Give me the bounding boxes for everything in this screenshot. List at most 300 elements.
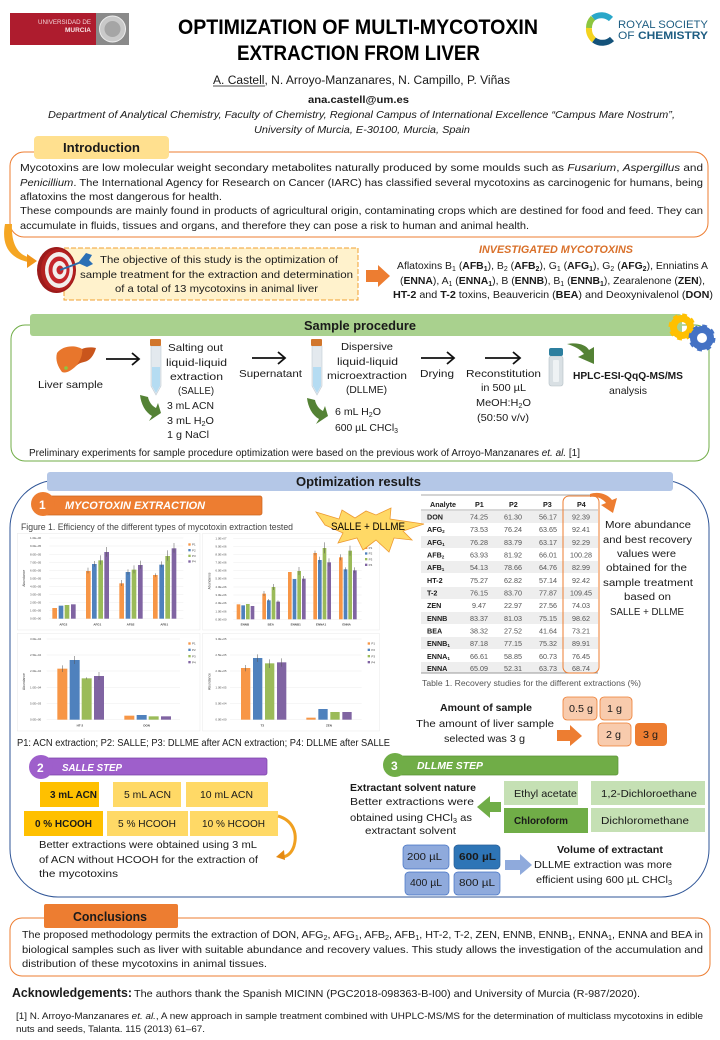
- table: recovery studies: 9.47: [472, 601, 486, 610]
- chart: aflatoxins: 3.0E+05: [30, 593, 42, 597]
- authors: A. Castell, N. Arroyo-Manzanares, N. Campillo, P. Viñas: [213, 75, 510, 87]
- chart: enniatins: 1.0E+07: [215, 536, 227, 540]
- label: supernatant: Supernatant: [239, 368, 302, 380]
- table: recovery studies: Analyte: [430, 500, 456, 509]
- heading: step 2 SALLE: SALLE STEP: [62, 763, 122, 774]
- chart: HT-2 and DON: 3.0E+04: [30, 637, 42, 641]
- heading: step 1 mycotoxin extraction: MYCOTOXIN EXTRACTION: [65, 500, 206, 512]
- caption: table 1: Table 1. Recovery studies for the different extractions (%): [422, 679, 641, 688]
- chart: aflatoxins: 7.0E+05: [30, 560, 42, 564]
- text: volume of extractant: DLLME extraction was more: [534, 859, 672, 871]
- text: conclusions body: , ENNA: [572, 930, 608, 941]
- chart: T2 and ZEN: P1: [371, 642, 375, 646]
- table: recovery studies: 75.27: [470, 576, 488, 585]
- heading: introduction: Introduction: [63, 141, 140, 155]
- text: analysis: HPLC-ESI-QqQ-MS/MS: [573, 370, 683, 382]
- text: SALLE result: the mycotoxins: [39, 868, 118, 880]
- table: recovery studies: P4: [577, 500, 586, 509]
- text: abundance conclusion: based on: [624, 591, 671, 603]
- panel: investigated mycotoxins: ), Enniatins A: [647, 261, 708, 272]
- table: recovery studies: 81.92: [504, 550, 522, 560]
- chart: T2 and ZEN: 2.0E+05: [215, 669, 227, 673]
- table: recovery studies: 76.15: [470, 588, 488, 598]
- text: abundance conclusion: [603, 519, 693, 618]
- table: recovery studies: ENNA: [427, 664, 447, 673]
- table: recovery studies: 92.41: [572, 525, 590, 534]
- icon: target with dart: [37, 247, 93, 293]
- chart: aflatoxins: Abundance: [22, 570, 26, 587]
- text: SALLE result: of ACN without HCOOH for the extraction of: [39, 854, 258, 866]
- table: recovery studies: 63.93: [470, 550, 488, 560]
- panel: conclusions: [10, 904, 710, 976]
- text: abundance conclusion: SALLE + DLLME: [610, 606, 684, 618]
- chart: aflatoxins: 4.0E+05: [30, 584, 42, 588]
- text: conclusions body: 1: [568, 935, 572, 942]
- chart: enniatins: ENNA1: [316, 623, 326, 627]
- text: SALLE result: [39, 839, 258, 880]
- chart: HT-2 and DON: 0.0E+00: [30, 718, 42, 722]
- text: SALLE: (SALLE): [178, 385, 214, 397]
- panel: investigated mycotoxins: 1: [557, 266, 561, 273]
- options: solvents: Ethyl acetate: [514, 789, 577, 800]
- panel: investigated mycotoxins: 2: [536, 266, 540, 273]
- panel: objective: [64, 248, 358, 300]
- chart: HT-2 and DON: P2: [192, 648, 196, 652]
- chart: T2 and ZEN: 1.0E+05: [215, 685, 227, 689]
- table: recovery studies: 66.01: [539, 550, 557, 560]
- text: DLLME: [327, 341, 407, 396]
- text: reconstitution: in 500 µL: [481, 382, 526, 394]
- chart: T2 and ZEN: P3: [371, 654, 375, 658]
- options: ACN and HCOOH: 10 mL ACN: [200, 790, 253, 801]
- table: recovery studies: 63.73: [539, 664, 557, 673]
- options: sample amount: [563, 697, 667, 746]
- panel: investigated mycotoxins: (: [456, 261, 463, 272]
- text: abundance conclusion: and best recovery: [603, 534, 693, 546]
- chart: aflatoxins: P4: [192, 560, 196, 564]
- table: recovery studies: 27.56: [539, 601, 557, 610]
- text: SALLE: liquid-liquid: [166, 357, 227, 369]
- chart: aflatoxins: AFB1: [160, 623, 168, 627]
- table: recovery studies: P2: [509, 500, 518, 509]
- chart: T2 and ZEN: ZEN: [326, 724, 332, 728]
- text: analysis: [573, 370, 683, 397]
- text: extractant solvent: [350, 783, 476, 837]
- text: preliminary note: Preliminary experiments for sample procedure optimization were based on the previous work of Arroyo-Manzanares et. al. [1]: [29, 448, 580, 459]
- chart: enniatins: 2.0E+06: [215, 601, 227, 605]
- text: conclusions body: [22, 930, 703, 970]
- panel: objective: sample treatment for the extraction and determination: [80, 269, 353, 281]
- panel: sample procedure: [11, 314, 709, 461]
- table: recovery studies: BEA: [427, 626, 442, 636]
- text: DLLME reagents: [335, 406, 398, 435]
- panel: investigated mycotoxins: ENNB), B: [515, 276, 560, 287]
- heading: optimization results: [47, 472, 673, 491]
- text: acknowledgements: The authors thank the Spanish MICINN (PGC2018-098363-B-I00) and University of Murcia (R-987/2020).: [134, 989, 640, 1000]
- text: introduction body: Mycotoxins are low molecular weight secondary metabolites naturally produced by some moulds such as Fusarium , Aspergillus and: [20, 163, 703, 174]
- chart: enniatins: 7.0E+06: [215, 561, 227, 565]
- label: drying: Drying: [420, 368, 454, 380]
- options: extractant volume: 600 µL: [459, 852, 497, 863]
- table: recovery studies: 54.13: [470, 563, 488, 572]
- chart: enniatins: P3: [369, 557, 373, 561]
- heading: step 3 DLLME: [383, 753, 618, 777]
- table: recovery studies: ZEN: [427, 601, 441, 610]
- text: reconstitution: [466, 368, 541, 424]
- text: DLLME reagents: 3: [394, 428, 398, 435]
- options: extractant volume: 200 µL: [407, 852, 442, 863]
- options: ACN and HCOOH: 10 % HCOOH: [202, 819, 265, 830]
- text: conclusions body: The proposed methodology permits the extraction of DON, AFG: [22, 930, 315, 941]
- chart: enniatins: 5.0E+06: [215, 577, 227, 581]
- panel: investigated mycotoxins: (: [614, 261, 621, 272]
- icon: gears: [670, 315, 714, 350]
- panel: investigated mycotoxins: ENNA: [459, 276, 492, 288]
- chart: aflatoxins: 9.0E+05: [30, 544, 42, 548]
- arrow: solvent: [477, 796, 501, 818]
- text: extractant solvent: extractant solvent: [365, 825, 456, 837]
- logo: Royal Society of Chemistry: OF CHEMISTRY: [618, 30, 709, 42]
- text: amount of sample: Amount of sample: [440, 703, 532, 714]
- panel: investigated mycotoxins: 1: [589, 266, 593, 273]
- chart: HT-2 and DON: P3: [192, 654, 196, 658]
- text: reconstitution: O: [523, 397, 531, 409]
- text: extractant solvent: Extractant solvent nature: [350, 783, 476, 794]
- panel: investigated mycotoxins: ), B (: [492, 276, 515, 287]
- chart: enniatins: BEA: [268, 623, 275, 627]
- panel: investigated mycotoxins: ZEN),: [678, 276, 705, 287]
- table: recovery studies: 64.76: [539, 563, 557, 572]
- options: solvents: [504, 781, 705, 833]
- chart: enniatins: P4: [369, 563, 373, 567]
- panel: investigated mycotoxins: Aflatoxins B: [397, 261, 452, 272]
- chart: aflatoxins: P1: [192, 543, 196, 547]
- arrow: sample amount: [557, 725, 582, 746]
- chart: HT-2 and DON: P1: [192, 642, 196, 646]
- options: solvents: Dichloromethane: [601, 816, 689, 827]
- options: extractant volume: 400 µL: [410, 878, 442, 889]
- table: recovery studies: 65.09: [470, 664, 488, 673]
- table: recovery studies: 56.17: [539, 512, 557, 522]
- chart: aflatoxins: 1.0E+06: [30, 536, 42, 540]
- heading: sample procedure: Sample procedure: [304, 319, 416, 333]
- table: recovery studies: 61.30: [504, 512, 522, 522]
- arrow: objective to mycotoxins: [366, 265, 390, 287]
- text: analysis: analysis: [609, 385, 647, 397]
- text: conclusions body: 1: [355, 935, 359, 942]
- panel: investigated mycotoxins: HT-2 and T-2 toxins, Beauvericin ( BEA) and Deoxynivalenol ( DON): [393, 290, 713, 301]
- affiliation: Department of Analytical Chemistry, Faculty of Chemistry, Regional Campus of International Excellence “Campus Mare Nostrum”,: [48, 110, 675, 121]
- table: recovery studies: 76.28: [470, 538, 488, 547]
- options: extractant volume: 800 µL: [459, 878, 495, 889]
- table: recovery studies: 109.45: [570, 588, 592, 598]
- options: ACN and HCOOH: 3 mL ACN: [50, 790, 97, 801]
- email: ana.castell@um.es: [308, 94, 409, 106]
- text: SALLE reagents: 3 mL H: [167, 415, 200, 427]
- table: recovery studies: 66.61: [470, 652, 488, 661]
- table: recovery studies: 1: [447, 656, 450, 661]
- table: recovery studies: 100.28: [570, 550, 592, 560]
- chart: aflatoxins: 6.0E+05: [30, 568, 42, 572]
- table: recovery studies: 73.21: [572, 626, 590, 636]
- logo: Royal Society of Chemistry: ROYAL SOCIETY: [618, 19, 709, 31]
- table: recovery studies: 58.85: [504, 652, 522, 661]
- panel: investigated mycotoxins: ), G: [593, 261, 610, 272]
- table: recovery studies: 57.14: [539, 576, 557, 585]
- arrow: step 2: [252, 352, 285, 364]
- text: DLLME reagents: O: [373, 406, 381, 418]
- table: recovery studies: 81.03: [504, 614, 522, 623]
- chart: enniatins: 1.0E+06: [215, 609, 227, 613]
- table: recovery studies: AFG: [427, 525, 442, 534]
- chart: enniatins: ENNB1: [291, 623, 301, 627]
- text: volume of extractant: Volume of extractant: [557, 845, 664, 856]
- table: recovery studies: 63.17: [539, 538, 557, 547]
- table: recovery studies: 76.24: [504, 525, 522, 534]
- chart: HT-2 and DON: 5.0E+03: [30, 701, 42, 705]
- panel: investigated mycotoxins: (: [508, 261, 515, 272]
- chart: enniatins: 8.0E+06: [215, 553, 227, 557]
- panel: investigated mycotoxins: 2: [643, 266, 647, 273]
- panel: investigated mycotoxins: 2: [504, 266, 508, 273]
- text: introduction body: [20, 163, 703, 232]
- table: recovery studies: 68.74: [572, 664, 590, 673]
- chart: enniatins: P1: [369, 546, 373, 550]
- chart: aflatoxins: 1.0E+05: [30, 609, 42, 613]
- table: recovery studies: 92.29: [572, 538, 590, 547]
- heading: conclusions: Conclusions: [73, 910, 147, 924]
- chart: aflatoxins: AFG2: [59, 623, 68, 627]
- text: SALLE reagents: 3 mL ACN: [167, 400, 214, 412]
- arrow: step 4: [485, 352, 520, 364]
- text: extractant solvent: as: [457, 812, 472, 824]
- heading: sample procedure: [30, 314, 682, 336]
- table: recovery studies: 60.73: [539, 652, 557, 661]
- chart: enniatins: 0.0E+00: [215, 617, 227, 621]
- text: conclusions body: 2: [385, 935, 389, 942]
- panel: investigated mycotoxins: AFB: [514, 261, 540, 273]
- chart: T2 and ZEN: 0.0E+00: [215, 718, 227, 722]
- logo: University of Murcia: UNIVERSIDAD DE: [38, 20, 91, 26]
- chart: enniatins: 9.0E+06: [215, 544, 227, 548]
- table: recovery studies: 78.66: [504, 563, 522, 572]
- table: recovery studies: 82.99: [572, 563, 590, 572]
- table: recovery studies: 89.91: [572, 639, 590, 648]
- arrow: volume: [505, 854, 532, 875]
- charts: abundance figure: [17, 533, 379, 731]
- heading: step 2 SALLE: [29, 755, 267, 779]
- chart: aflatoxins: [17, 533, 200, 630]
- text: DLLME: Dispersive: [341, 341, 393, 353]
- label: liver sample: Liver sample: [38, 379, 103, 391]
- text: introduction body: accumulate in fluids, tissues and organs, and therefore they can pose a risk to human and animal health.: [20, 221, 529, 232]
- icon: green arrow DLLME: [307, 398, 328, 424]
- table: recovery studies: 74.03: [572, 601, 590, 610]
- panel: investigated mycotoxins: ENNB: [571, 276, 604, 288]
- panel: investigated mycotoxins: (: [561, 261, 568, 272]
- options: sample amount: 0.5 g: [569, 703, 593, 715]
- chart: aflatoxins: 0.0E+00: [30, 617, 42, 621]
- text: DLLME: liquid-liquid: [337, 356, 398, 368]
- text: conclusions body: , HT-2, T-2, ZEN, ENNB, ENNB: [419, 930, 568, 941]
- text: acknowledgements: [12, 986, 640, 1000]
- table: recovery studies: P3: [543, 500, 552, 509]
- chart: HT-2 and DON: P4: [192, 660, 196, 664]
- panel: investigated mycotoxins: 1: [484, 266, 488, 273]
- panel: investigated mycotoxins: 1: [452, 266, 456, 273]
- text: conclusions body: 2: [323, 935, 328, 942]
- text: conclusions body: , AFB: [359, 930, 385, 941]
- text: amount of sample: The amount of liver sample: [416, 718, 554, 730]
- text: DLLME: microextraction: [327, 370, 407, 382]
- text: reconstitution: MeOH:H: [476, 397, 517, 409]
- table: recovery studies: ENNB: [427, 614, 447, 623]
- chart: aflatoxins: P2: [192, 548, 196, 552]
- table: recovery studies: 62.82: [504, 576, 522, 585]
- chart: aflatoxins: 5.0E+05: [30, 576, 42, 580]
- text: conclusions body: , AFG: [328, 930, 355, 941]
- options: ACN and HCOOH: 5 % HCOOH: [118, 819, 176, 830]
- chart: enniatins: P2: [369, 552, 373, 556]
- options: sample amount: 3 g: [643, 729, 658, 741]
- heading: conclusions: [44, 904, 178, 928]
- table: recovery studies: 22.97: [504, 601, 522, 610]
- text: extractant solvent: obtained using CHCl: [350, 812, 446, 824]
- chart: T2 and ZEN: Abundance: [207, 673, 211, 690]
- table: recovery studies: 87.18: [470, 639, 488, 648]
- text: conclusions body: biological samples such as liver with suitable abundance and recovery values. This study allows the investigation of the accumulation and: [22, 945, 703, 956]
- panel: investigated mycotoxins: (ENNA), A: [400, 276, 449, 287]
- chart: T2 and ZEN: 2.5E+05: [215, 653, 227, 657]
- table: recovery studies: 73.53: [470, 525, 488, 534]
- text: reference: [16, 1011, 703, 1034]
- text: introduction body: aflatoxins the most dangerous for health.: [20, 192, 222, 203]
- panel: investigated mycotoxins: (: [564, 276, 571, 287]
- options: solvents: Chloroform: [514, 816, 568, 827]
- logo: Royal Society of Chemistry: [589, 15, 709, 43]
- text: DLLME reagents: 2: [369, 412, 373, 419]
- panel: investigated mycotoxins: INVESTIGATED MYCOTOXINS: [479, 244, 634, 256]
- table: recovery studies: 92.39: [572, 512, 590, 522]
- text: introduction body: Penicillium . The International Agency for Research on Cancer (IARC) has classified several mycotoxins as carcinogenic for humans, being: [20, 178, 703, 189]
- chart: enniatins: 4.0E+06: [215, 585, 227, 589]
- icon: tube SALLE: [150, 339, 161, 395]
- text: SALLE: [166, 342, 227, 397]
- text: conclusions body: , ENNA and BEA in: [612, 930, 703, 941]
- chart: aflatoxins: AFB2: [127, 623, 135, 627]
- table: recovery studies: 76.45: [572, 652, 590, 661]
- table: recovery studies: 41.64: [539, 626, 557, 636]
- table: recovery studies: 92.42: [572, 576, 590, 585]
- callout: SALLE + DLLME burst: [316, 508, 424, 552]
- table: recovery studies: 77.15: [504, 639, 522, 648]
- text: DLLME: (DLLME): [346, 384, 387, 396]
- text: conclusions body: 1: [415, 935, 419, 942]
- panel: optimization results: [10, 472, 709, 897]
- panel: objective: The objective of this study is the optimization of: [100, 254, 338, 266]
- arrow: table to conclusion: [590, 493, 617, 513]
- heading: step 1 mycotoxin extraction: [31, 492, 262, 516]
- panel: investigated mycotoxins: AFG: [567, 261, 593, 273]
- chart: T2 and ZEN: T2: [261, 724, 264, 728]
- table: recovery studies: 1: [442, 567, 445, 572]
- panel: investigated mycotoxins: ), Zearalenone (: [604, 276, 678, 287]
- table: recovery studies: 1: [447, 643, 450, 648]
- table: recovery studies: 83.70: [504, 588, 522, 598]
- title: OPTIMIZATION OF MULTI-MYCOTOXIN: [178, 15, 538, 39]
- panel: investigated mycotoxins: 1: [560, 281, 564, 288]
- options: sample amount: 2 g: [606, 729, 621, 741]
- chart: T2 and ZEN: P4: [371, 660, 375, 664]
- arrow: SALLE result: [276, 816, 295, 860]
- panel: investigated mycotoxins: 1: [449, 281, 453, 288]
- text: SALLE reagents: O: [206, 415, 214, 427]
- table: recovery studies: 77.87: [539, 588, 557, 598]
- options: ACN and HCOOH: [24, 782, 278, 836]
- table: recovery studies: 63.65: [539, 525, 557, 534]
- chart: HT-2 and DON: HT-2: [77, 724, 83, 728]
- icon: vial: [549, 348, 563, 386]
- text: abundance conclusion: obtained for the: [606, 562, 687, 574]
- table: recovery studies: 98.62: [572, 614, 590, 623]
- heading: optimization results: Optimization results: [296, 475, 421, 489]
- table: recovery studies: AFB: [427, 563, 442, 572]
- panel: investigated mycotoxins: [393, 244, 713, 301]
- text: volume of extractant: [534, 845, 672, 887]
- text: volume of extractant: efficient using 600 µL CHCl: [536, 874, 663, 886]
- text: DLLME reagents: 6 mL H: [335, 406, 368, 418]
- text: SALLE: Salting out: [168, 342, 223, 354]
- chart: HT-2 and DON: 1.0E+04: [30, 685, 42, 689]
- chart: HT-2 and DON: 2.0E+04: [30, 669, 42, 673]
- text: acknowledgements: Acknowledgements:: [12, 986, 132, 1000]
- text: introduction body: These compounds are mainly found in products of agricultural origin, contaminating crops which are destined for food and feed. They can: [20, 206, 703, 217]
- caption: figure 1: Figure 1. Efficiency of the different types of mycotoxin extraction tested: [21, 522, 293, 532]
- text: extractant solvent: Better extractions were: [350, 796, 474, 808]
- options: ACN and HCOOH: 0 % HCOOH: [35, 819, 92, 830]
- icon: green arrow to analysis: [567, 343, 594, 364]
- text: SALLE result: Better extractions were obtained using 3 mL: [39, 839, 257, 851]
- chart: aflatoxins: 2.0E+05: [30, 601, 42, 605]
- panel: objective: of a total of 13 mycotoxins in animal liver: [115, 283, 319, 295]
- chart: T2 and ZEN: 5.0E+04: [215, 701, 227, 705]
- text: reconstitution: (50:50 v/v): [477, 412, 529, 424]
- table: recovery studies: 74.25: [470, 512, 488, 522]
- text: abundance conclusion: More abundance: [605, 519, 691, 531]
- chart: aflatoxins: P3: [192, 554, 196, 558]
- table: recovery studies: AFG: [427, 538, 442, 547]
- table: recovery studies: [421, 495, 599, 673]
- heading: step 3 DLLME: DLLME STEP: [417, 761, 483, 772]
- text: reconstitution: 2: [518, 403, 523, 410]
- chart: HT-2 and DON: DON: [143, 724, 150, 728]
- panel: investigated mycotoxins: 1: [488, 281, 492, 288]
- panel: investigated mycotoxins: ), G: [539, 261, 557, 272]
- text: SALLE reagents: 2: [202, 421, 206, 428]
- heading: step 1 mycotoxin extraction: 1: [39, 498, 46, 512]
- chart: aflatoxins: AFG1: [93, 623, 102, 627]
- panel: investigated mycotoxins: ), B: [488, 261, 504, 272]
- text: abundance conclusion: sample treatment: [603, 577, 693, 589]
- text: reconstitution: Reconstitution: [466, 368, 541, 380]
- table: recovery studies: 83.37: [470, 614, 488, 623]
- chart: enniatins: 3.0E+06: [215, 593, 227, 597]
- table: recovery studies: 1: [442, 542, 445, 547]
- text: conclusions body: distribution of these mycotoxins in animal tissues.: [22, 959, 267, 970]
- affiliation: [48, 110, 675, 136]
- table: recovery studies: DON: [427, 512, 443, 522]
- arrow: intro to objective: [4, 224, 37, 268]
